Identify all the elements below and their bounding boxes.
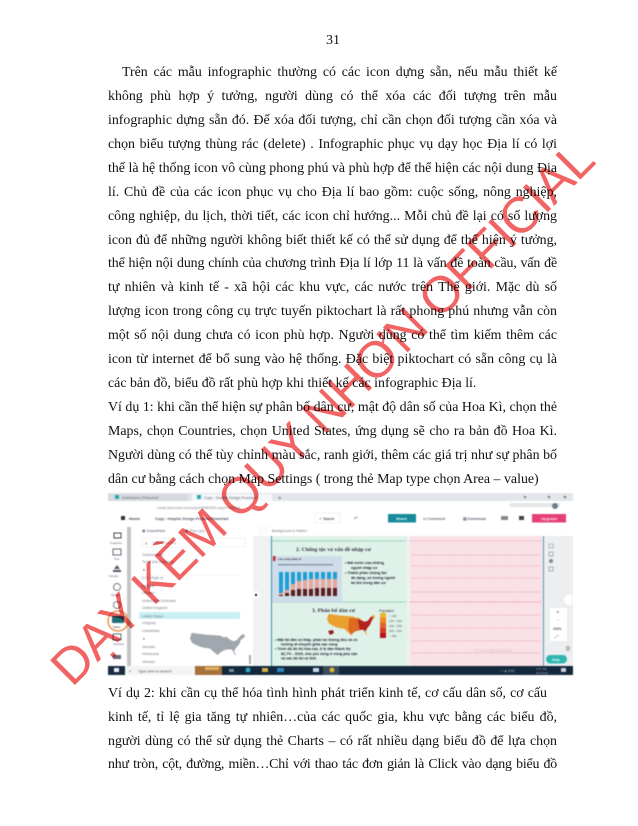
panel: countries list: ▾: [143, 568, 145, 572]
slide: pink blank page: [410, 536, 544, 666]
taskbar: 8/12/2021: [536, 671, 549, 675]
left sidebar icons: Text: [114, 557, 120, 561]
bullets: section 2: [345, 561, 395, 585]
panel: countries list: Turkmenistan: [142, 553, 164, 557]
panel: countries list: Vanuatu: [142, 645, 155, 649]
text block: example 2 paragraph: kinh tế, tỉ lệ gia tăng tự nhiên…của các quốc gia, khu vực bằng các biểu đồ,: [108, 710, 557, 724]
panel: countries list: United Kingdom: [142, 606, 168, 610]
text block: intro paragraphs: infographic dựng sẵn đó. Để xóa đối tượng, chỉ cần chọn đối tượng cần xóa và: [108, 113, 557, 128]
text block: intro paragraphs: Ví dụ 1: khi cần thể hiện sự phân bố dân cư, mật độ dân số của Hoa Kì, chọn thẻ: [108, 400, 557, 415]
bullets: section 3: và các đô thị vệ tinh: [281, 656, 317, 660]
editor toolbar: ◉ Countries: [142, 528, 166, 533]
editor toolbar: Background & Pattern: [272, 529, 307, 533]
legend: population: Population: [379, 609, 394, 613]
text block: intro paragraphs: một số nội dung chưa có icon phù hợp. Người dùng có thể tìm kiếm thêm các: [108, 328, 557, 343]
left sidebar icons: [109, 527, 131, 666]
taskbar: [108, 666, 573, 675]
text block: intro paragraphs: icon đủ để những người không biết thiết kế có thể sử dụng để thể hiện ý tưởng,: [108, 233, 557, 248]
text block: intro paragraphs: chọn biểu tượng thùng rác (delete) . Infographic phục vụ dạy học Địa lí có lợi: [108, 137, 557, 152]
heading: section 2: 2. Chống tộc và vấn đề nhập cư: [296, 546, 371, 553]
icon: highlighted maps button: Maps: [113, 625, 121, 629]
map: population density: [327, 614, 375, 635]
taskbar: ⌕: [129, 668, 131, 674]
browser chrome: Dashboard | Piktochart: [122, 496, 158, 500]
bullets: section 3: [275, 638, 358, 660]
editor toolbar: Upgrade: [541, 516, 558, 521]
panel: right tools: +: [556, 610, 560, 616]
panel: countries list: Uruguay: [142, 621, 156, 625]
panel: countries list: Venezuela: [142, 652, 159, 656]
panel: right tools: [544, 536, 573, 666]
taskbar: 9:07 PM: [536, 667, 547, 671]
left sidebar icons: Uploads: [113, 642, 125, 646]
text block: example 2 paragraph: người dùng có thể sử dụng thẻ Charts – có rất nhiều dạng biểu đồ để lựa chọn: [108, 734, 557, 748]
panel: countries list: United Arab Emirates: [142, 599, 176, 603]
text block: example 2 paragraph: Ví dụ 2: khi cần cụ thể hóa tình hình phát triển kinh tế, cơ cấu dân số, cơ cấu: [108, 686, 547, 701]
panel: countries list: Uganda: [142, 584, 155, 588]
browser chrome: Copy - Graphic Design Process F: [204, 496, 258, 500]
slide: green infographic page: [271, 536, 407, 666]
page number: 31: [326, 33, 340, 48]
editor toolbar: ▤ Download: [463, 517, 486, 521]
browser chrome: create.piktochart.com/output/49480953-copy/47043353: [157, 506, 240, 510]
panel: countries list: Turks and Caicos Is.: [142, 560, 175, 564]
editor toolbar: ◉ Pop-ups: [185, 528, 204, 533]
text block: intro paragraphs: tự nhiên và kinh tế - xã hội các khu vực, các nước trên Thế giới. Mặc dù số: [108, 280, 557, 295]
canvas background: [252, 536, 410, 666]
panel: countries list: United States: [142, 614, 164, 618]
bullets: section 2: người nhập cư: [351, 566, 378, 570]
text block: example 2 paragraph: như tròn, cột, đường, miền…Chỉ với thao tác đơn giản là Click vào dạng biểu đồ: [108, 757, 557, 772]
slide: pink blank page: Screen Whiteboard: [474, 648, 512, 653]
text block: intro paragraphs: Maps, chọn Countries, chọn United States, ứng dụng sẽ cho ra bản đồ Hoa Kì.: [108, 424, 557, 439]
bullets: section 2: đa dạng, số lượng người: [351, 576, 395, 580]
text block: intro paragraphs: lí. Chủ đề của các icon phục vụ cho Địa lí bao gồm: cuộc sống, nông nghiệp,: [108, 185, 557, 200]
legend: population: 100 - 200: [389, 619, 402, 623]
bullets: section 3: • Mật độ dân số thấp, phân bố không đều và có: [275, 638, 358, 642]
editor toolbar: ▭ Comment: [423, 517, 446, 521]
panel: countries list: ▾: [143, 637, 145, 641]
text block: intro paragraphs: icon từ internet để bổ sung vào hệ thống. Đặc biệt piktochart có sẵn công cụ là: [108, 352, 557, 367]
editor toolbar: Copy - Graphic Design Process Flowchart: [155, 517, 229, 521]
text block: intro paragraphs: Trên các mẫu infographic thường có các icon dựng sẵn, nếu mẫu thiết kế: [122, 65, 557, 80]
left sidebar icons: Design: [109, 574, 119, 578]
editor toolbar: Home: [129, 516, 141, 521]
panel: countries list: U.S. Virgin Is.: [142, 576, 164, 580]
panel: countries list: [139, 538, 251, 664]
editor toolbar: Share: [396, 516, 408, 521]
editor toolbar: [121, 513, 566, 534]
editor toolbar: ✓ Saved: [319, 517, 335, 521]
taskbar: ^ ▪ ◉ ENG: [500, 669, 515, 673]
bullets: section 2: • Thành phần chủng tộc: [345, 571, 387, 575]
panel: countries list: Vietnam: [142, 660, 155, 664]
text block: intro paragraphs: Người dùng có thể tùy chỉnh màu sắc, ranh giới, thêm các giá trị như sự phân bố: [108, 448, 557, 463]
taskbar: Type here to search: [138, 670, 172, 674]
heading: section 3: 3. Phân bố dân cư: [312, 607, 356, 614]
text block: intro paragraphs: dân cư bằng cách chọn Map Settings ( trong thẻ Map type chọn Area – value): [108, 472, 539, 487]
bullets: section 2: • Đất nước của những: [345, 561, 384, 565]
left sidebar icons: Graphics: [110, 541, 123, 545]
browser chrome: [108, 493, 573, 675]
legend: population: 200 - 299: [389, 624, 402, 628]
panel: right tools: Help: [552, 658, 561, 662]
bullets: section 3: • Trình độ đô thị hóa cao, tỉ lệ dân thành thị: [275, 647, 350, 651]
text block: intro paragraphs: thế là hệ thống icon vô cùng phong phú và phù hợp để thể hiện các nội dung Địa: [108, 161, 557, 176]
panel: right tools: −: [556, 618, 560, 624]
text block: example 2 paragraph: [108, 686, 557, 772]
legend: population: [379, 609, 402, 638]
panel: right tools: ⤢: [555, 634, 559, 639]
bullets: section 3: 82,7% - 2020, chủ yếu sống ở vùng phụ cận: [281, 652, 358, 656]
panel: countries list: Search country: [152, 541, 176, 545]
text block: intro paragraphs: các bản đồ, biểu đồ rất phù hợp khi thiết kế các infographic Địa lí.: [108, 376, 476, 391]
panel: countries list: Ukraine: [142, 591, 154, 595]
icon: highlighted maps button: [108, 611, 128, 631]
legend: population: > 100: [389, 614, 397, 618]
watermark: DẠY KÈM QUY NHƠN OFFICIAL: [39, 130, 605, 696]
left sidebar icons: Shapes: [111, 593, 122, 597]
panel: right tools: 100%: [553, 627, 562, 631]
text block: intro paragraphs: [108, 65, 558, 487]
text block: intro paragraphs: công nghiệp, du lịch, thời tiết, các icon chỉ hướng... Mỗi chủ đề lại có số lượng: [108, 209, 557, 224]
text block: intro paragraphs: thể hiện nội dung chính của chương trình Địa lí lớp 11 là vấn đề toàn cầu, vấn đề: [108, 256, 557, 271]
panel: countries list: Uzbekistan: [142, 629, 160, 633]
text block: intro paragraphs: lượng icon trong công cụ trực tuyến piktochart là rất phong phú nhưng vẫn còn: [108, 304, 557, 319]
bullets: section 3: hướng di chuyển giữa các vùng: [281, 642, 337, 646]
bullets: section 2: lai lớn trong dân cư: [351, 581, 386, 585]
panel: countries list: ⌕: [145, 541, 148, 546]
browser chrome: +: [278, 496, 282, 502]
text block: intro paragraphs: không phù hợp ý tưởng, người dùng có thể xóa các đối tượng trên mẫu: [108, 89, 557, 104]
editor toolbar: ↶: [354, 516, 358, 522]
legend: population: 300 - 450: [389, 629, 402, 633]
map: gray United States: [190, 633, 245, 655]
bar chart: immigration: Lao cong nhan di: [278, 557, 301, 561]
legend: population: > 450: [389, 634, 397, 638]
